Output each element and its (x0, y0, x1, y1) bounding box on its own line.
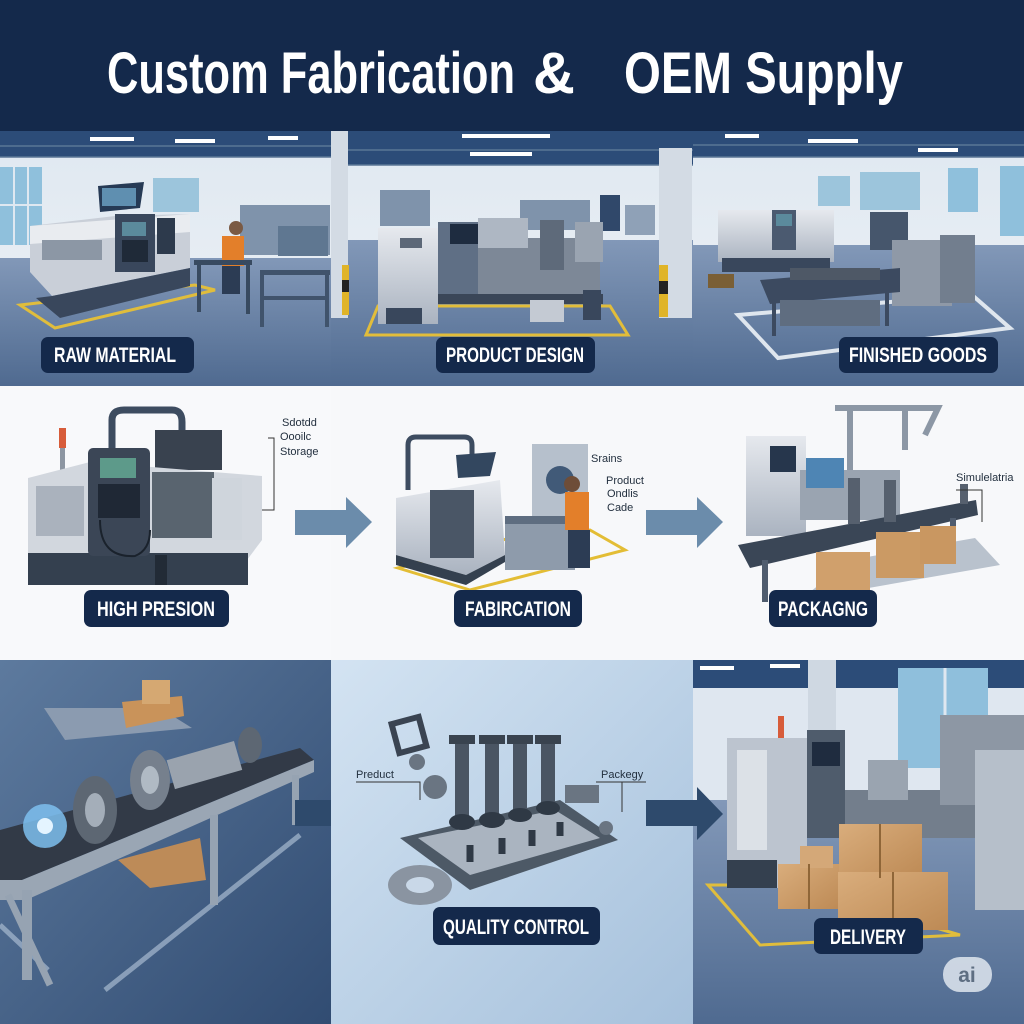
boxes (778, 824, 948, 930)
label: QUALITY CONTROL (443, 916, 589, 939)
label (454, 590, 582, 627)
ai badge (943, 957, 992, 992)
worker at desk (194, 221, 330, 327)
callout: Sdotdd (282, 417, 317, 429)
callout (356, 769, 420, 800)
callout: Preduct (356, 769, 394, 781)
label (84, 590, 229, 627)
parts assembly (388, 717, 618, 905)
callout: Packegy (601, 769, 644, 781)
panel: raw material (0, 131, 331, 386)
arrow (295, 787, 372, 840)
panel: packaging (738, 408, 1014, 627)
label: DELIVERY (830, 926, 906, 949)
callout: Ondlis (607, 488, 639, 500)
machine: lathe (718, 210, 834, 272)
label: FABIRCATION (465, 598, 571, 621)
callout: Cade (607, 502, 633, 514)
boxes (816, 526, 956, 590)
callout (262, 417, 319, 510)
title banner: & (533, 41, 575, 106)
label (769, 590, 877, 627)
panel: delivery (693, 660, 1024, 1024)
callout (956, 472, 1014, 522)
callout: Srains (591, 453, 623, 465)
arrow (295, 497, 372, 548)
title banner: OEM Supply (624, 41, 903, 106)
title banner: Custom Fabrication (107, 41, 515, 106)
callout: Product (606, 475, 644, 487)
machine: large lathe (378, 218, 603, 324)
callout (591, 453, 644, 514)
machine: packing line (760, 212, 975, 336)
machine: lathe (30, 182, 190, 318)
panel: high precision (0, 386, 331, 660)
callout: Storage (280, 446, 319, 458)
panel: product design (331, 131, 693, 386)
label (433, 907, 600, 945)
label: RAW MATERIAL (54, 344, 176, 367)
machine: cnc (28, 410, 262, 585)
callout: Oooilc (280, 431, 312, 443)
panel: finished goods (693, 131, 1024, 386)
label (41, 337, 194, 373)
title banner (0, 0, 1024, 131)
machine: cnc (727, 715, 1024, 910)
machine: small cnc (396, 437, 505, 585)
panel: conveyor (0, 660, 331, 1024)
label: HIGH PRESION (97, 598, 215, 621)
label (436, 337, 595, 373)
boxes on table (122, 680, 184, 728)
panel: quality control (331, 660, 693, 1024)
callout (596, 769, 646, 812)
machine: conveyor with parts (0, 727, 314, 985)
label (839, 337, 998, 373)
arrow (646, 787, 723, 840)
machine: conveyor (738, 408, 978, 602)
label: PACKAGNG (778, 598, 868, 621)
machine: control cabinet and worker (505, 444, 590, 570)
ai badge: ai (958, 964, 976, 987)
callout: Simulelatria (956, 472, 1014, 484)
arrow (646, 497, 723, 548)
label (814, 918, 923, 954)
label: PRODUCT DESIGN (446, 344, 584, 367)
panel: fabrication (396, 437, 644, 627)
